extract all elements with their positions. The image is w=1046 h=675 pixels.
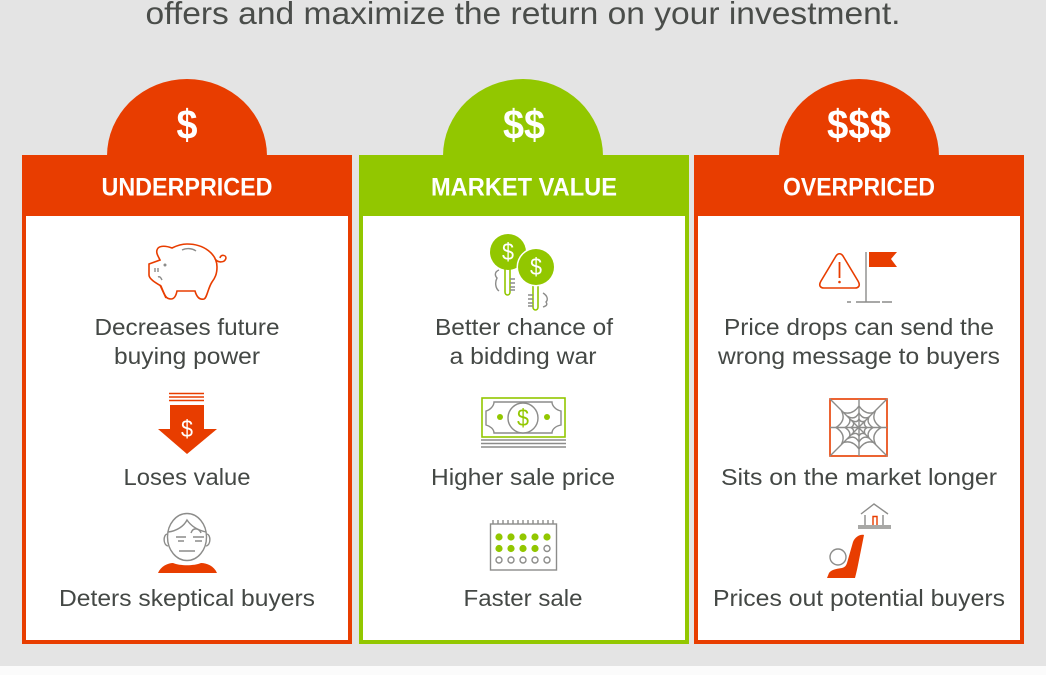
icon: stack of cash [481,398,566,447]
icon: piggy bank [149,244,226,299]
text: better chance of a bidding war: a bidding war [450,343,597,369]
text: price drops can send the wrong message to buyers [717,314,1000,369]
panel frame: overpriced [696,157,1022,642]
panel frame: market value [361,157,687,642]
text: deters skeptical buyers: Deters skeptical buyers [59,585,315,611]
dome: market value [443,79,603,156]
icon: bidding paddles [490,234,556,310]
icon: house and car seat [827,504,891,578]
icon: stack of cash: $ [517,405,529,432]
panel: underpriced [22,79,352,642]
icon: down arrow with dollar: $ [181,416,193,443]
text: price drops can send the wrong message to buyers: wrong message to buyers [717,343,1000,369]
text: faster sale: Faster sale [464,585,582,611]
text: prices out potential buyers: Prices out potential buyers [713,585,1005,611]
heading: underpriced: UNDERPRICED [102,174,272,202]
panel frame: underpriced [24,157,350,642]
dome: overpriced [779,79,939,156]
icon: warning sign and flag [820,252,897,302]
text: price drops can send the wrong message to buyers: Price drops can send the [724,314,994,340]
icon: cobweb [830,399,887,456]
text: decreases future buying power: buying power [114,343,260,369]
dome: underpriced [107,79,267,156]
heading: market value: MARKET VALUE [431,174,617,202]
icon: skeptical face [158,514,217,573]
panel: overpriced [694,79,1024,642]
icon: bidding paddles: $ [502,239,514,266]
heading: overpriced: OVERPRICED [783,174,935,202]
icon: down arrow with dollar [158,394,217,454]
header band: market value [359,155,689,216]
header band: underpriced [22,155,352,216]
text: loses value: Loses value [124,464,250,490]
header band: overpriced [694,155,1024,216]
icon: calendar [490,520,556,570]
price symbol: one dollar: $ [176,101,198,148]
price symbol: three dollars: $$$ [827,101,891,148]
text: higher sale price: Higher sale price [431,464,615,490]
icon: bidding paddles: $ [530,254,542,281]
text: decreases future buying power [94,314,280,369]
price symbol: two dollars: $$ [503,101,545,148]
text: better chance of a bidding war: Better chance of [435,314,613,340]
text: better chance of a bidding war [435,314,613,369]
text: decreases future buying power: Decreases future [94,314,280,340]
text: sits on the market longer: Sits on the market longer [721,464,997,490]
panel: market value [359,79,689,642]
